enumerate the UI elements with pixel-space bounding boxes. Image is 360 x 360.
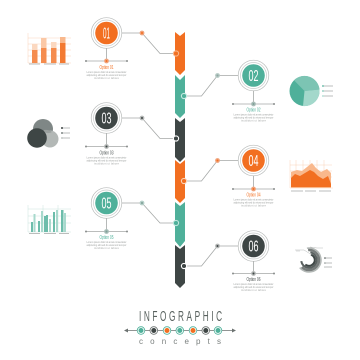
connector 06 — [181, 244, 238, 269]
title: INFOGRAPHIC — [139, 307, 225, 325]
step 04: incididunt ut labore — [241, 204, 267, 208]
central arrow timeline spine — [175, 32, 185, 288]
step 05: Lorem ipsum dolor sit amet consectetur — [86, 240, 127, 244]
teal bar chart — [28, 205, 71, 234]
step 05: Option 05 — [100, 235, 114, 241]
step 04: adipiscing elit sed do eiusmod tempor — [234, 200, 274, 204]
step 02: Lorem ipsum dolor sit amet consectetur — [234, 112, 274, 116]
step 02: incididunt ut labore — [241, 118, 267, 122]
step 03: 03 — [102, 110, 112, 128]
connector 02 — [181, 73, 238, 99]
step 01: 01 — [103, 26, 110, 42]
step 06: adipiscing elit sed do eiusmod tempor — [234, 285, 274, 289]
step 01: Lorem ipsum dolor sit amet consectetur — [86, 70, 127, 74]
step 06: incididunt ut labore — [241, 288, 267, 292]
step 01: adipiscing elit sed do eiusmod tempor — [86, 73, 127, 77]
step 02: 02 — [248, 68, 258, 85]
pie chart — [290, 76, 333, 106]
step 03: Lorem ipsum dolor sit amet consectetur — [86, 156, 127, 160]
step 01 — [85, 18, 128, 80]
step 02: Option 02 — [246, 108, 261, 114]
step 03: incididunt ut labore — [94, 162, 120, 166]
step 02 — [232, 60, 275, 122]
step 04 — [232, 145, 275, 208]
step 06: Lorem ipsum dolor sit amet consectetur — [234, 282, 274, 286]
step 03: adipiscing elit sed do eiusmod tempor — [86, 158, 127, 162]
step 04: 04 — [248, 153, 259, 170]
orange bar chart — [28, 33, 71, 64]
step 05 — [85, 188, 128, 250]
step 04: Option 04 — [246, 192, 261, 198]
step 03 — [85, 103, 128, 166]
step 04: Lorem ipsum dolor sit amet consectetur — [234, 198, 274, 202]
step 06: Option 06 — [246, 277, 261, 283]
orange area chart — [290, 160, 333, 191]
connector 05 — [122, 201, 179, 226]
connector 04 — [181, 158, 238, 184]
step 05: 05 — [102, 196, 112, 212]
step 05: adipiscing elit sed do eiusmod tempor — [86, 243, 127, 247]
radial chart — [295, 246, 332, 274]
step 05: incididunt ut labore — [94, 246, 120, 250]
step 06 — [232, 231, 275, 292]
step 02: adipiscing elit sed do eiusmod tempor — [234, 116, 274, 120]
connector 01 — [122, 31, 179, 56]
footer timeline — [124, 327, 236, 334]
subtitle: concepts — [139, 337, 221, 346]
connector 03 — [122, 116, 179, 141]
step 01: Option 01 — [100, 65, 114, 71]
step 03: Option 03 — [100, 150, 114, 156]
step 06: 06 — [248, 238, 258, 256]
venn diagram — [27, 119, 70, 148]
step 01: incididunt ut labore — [94, 76, 120, 80]
